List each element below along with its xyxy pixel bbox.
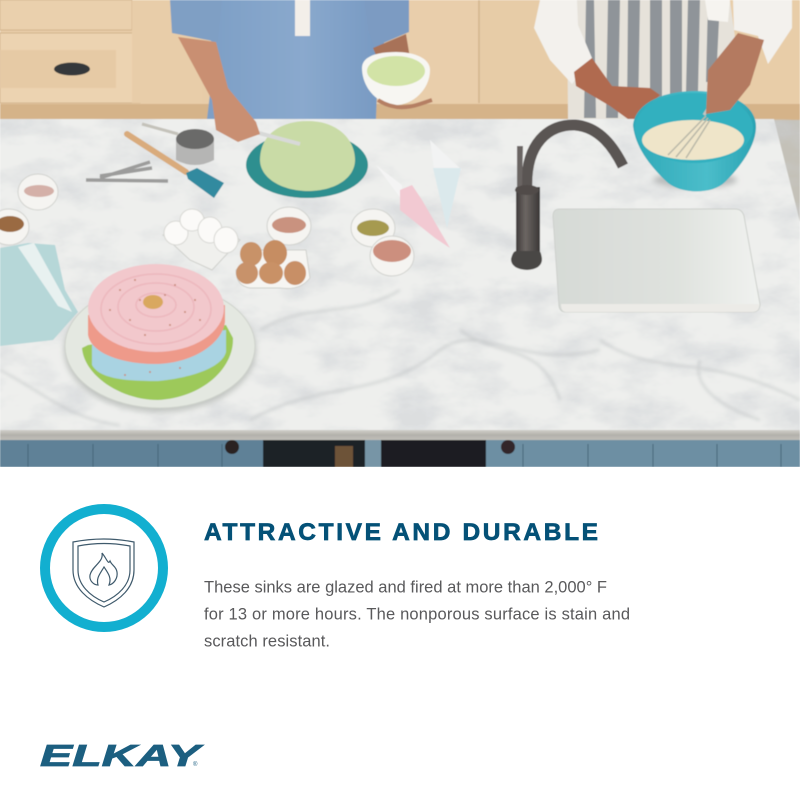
body text: These sinks are glazed and fired at more than 2,000° F [204, 578, 607, 596]
utensils: cups, spoons, spatula [86, 124, 224, 198]
folded towel [0, 243, 78, 346]
bowl of green icing [362, 52, 432, 107]
piping bags [376, 140, 462, 248]
wood cabinets [0, 0, 800, 120]
heading: ATTRACTIVE AND DURABLE [204, 519, 598, 546]
logo: Elkay: ® [193, 761, 198, 768]
blue base cabinets [0, 440, 800, 467]
left person torso [170, 0, 410, 119]
body text: for 13 or more hours. The nonporous surface is stain and [204, 606, 630, 624]
small sprinkle bowls [0, 174, 414, 276]
logo: Elkay [40, 738, 205, 773]
body text: scratch resistant. [204, 632, 330, 650]
undermount sink [553, 209, 760, 312]
logo: Elkay: ELKAY [40, 738, 205, 773]
icon: flame shield in cyan ring [45, 509, 163, 627]
body text [204, 578, 630, 650]
floor [770, 120, 800, 240]
right hand over bowl [706, 33, 764, 114]
white content panel [0, 467, 800, 800]
left arm and hand with spatula [178, 37, 260, 142]
marble countertop [0, 119, 800, 440]
photo: kitchen scene [0, 0, 800, 467]
drawer handle [54, 62, 90, 76]
green frosted cake on teal plate [240, 121, 368, 198]
faucet [511, 125, 623, 270]
sprinkles [109, 279, 201, 376]
teal mixing bowl with batter and whisk [633, 91, 756, 191]
eggs in white trays [163, 209, 310, 289]
right person in apron [534, 0, 792, 122]
layered cake on white plate [64, 264, 256, 412]
